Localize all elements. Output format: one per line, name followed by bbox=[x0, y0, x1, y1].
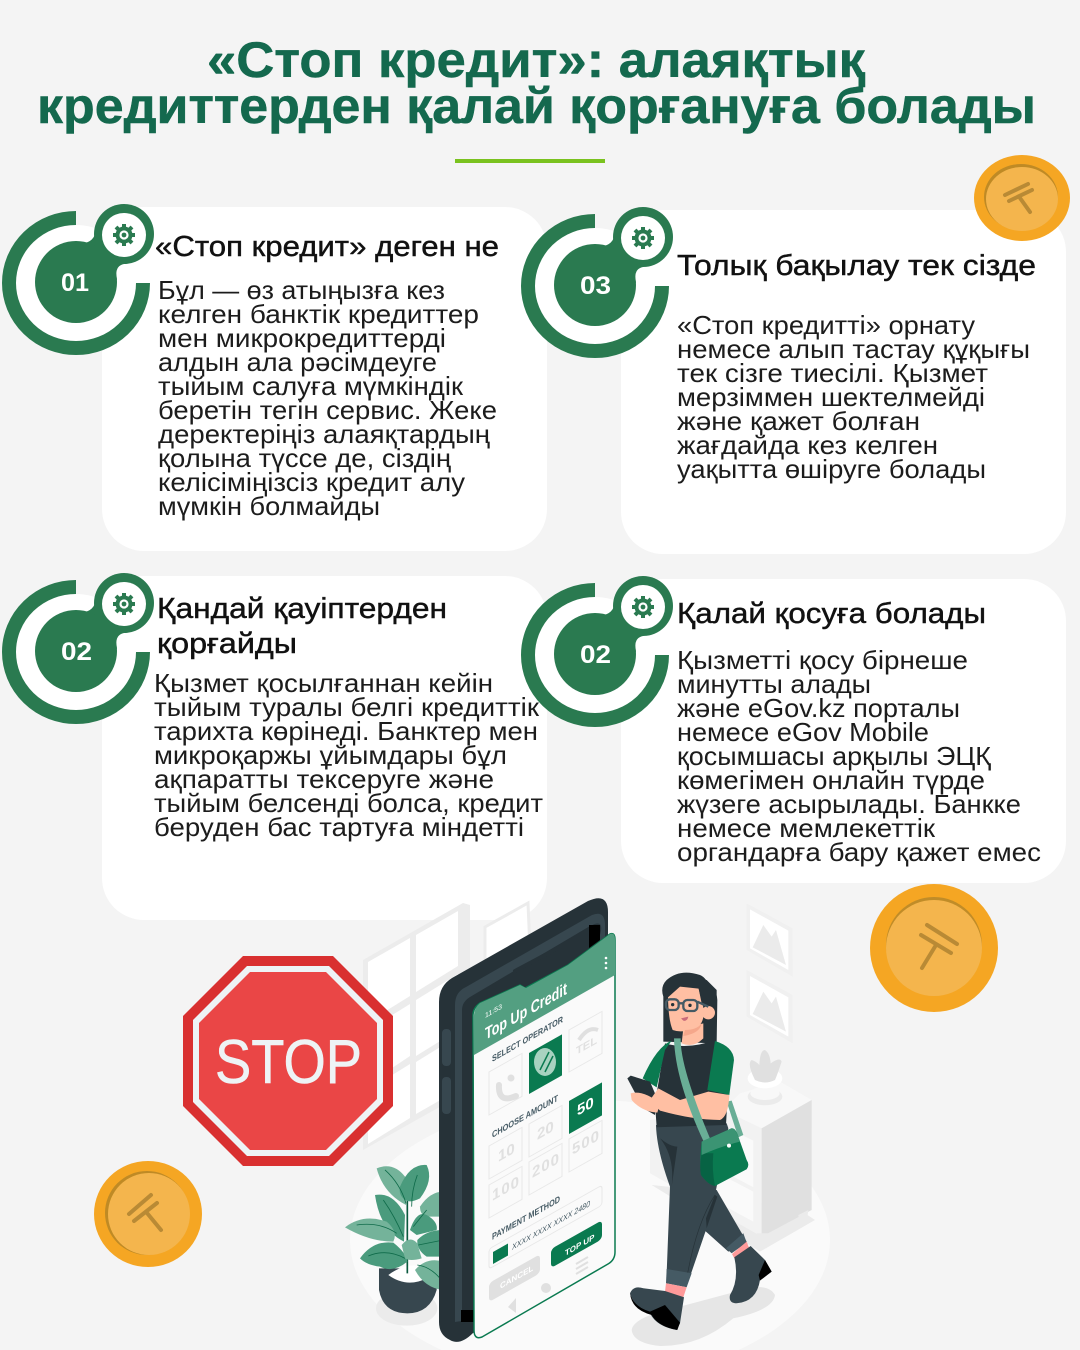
amounts: 500 bbox=[572, 1127, 599, 1159]
floor shadow bbox=[632, 1287, 775, 1346]
body text: жүзеге асырылады. Банкке bbox=[677, 789, 1021, 819]
illustration: woman walking with phone bbox=[627, 973, 775, 1346]
body text: мен микрокредиттерді bbox=[158, 323, 446, 353]
body text: беруден бас тартуға міндетті bbox=[154, 812, 524, 842]
amounts bbox=[489, 1082, 602, 1218]
back leg and boot bbox=[697, 1187, 747, 1252]
body text: немесе eGov Mobile bbox=[677, 717, 929, 747]
shirt bbox=[655, 1040, 728, 1127]
illustration: potted plant bbox=[345, 1165, 443, 1326]
coin: top right bbox=[974, 155, 1070, 241]
heading: қорғайды bbox=[157, 628, 297, 660]
body text: Қызметті қосу бірнеше bbox=[677, 645, 968, 675]
phone earpiece bbox=[515, 947, 560, 971]
body text: органдарға бару қажет емес bbox=[677, 837, 1041, 867]
body text: келген банктік кредиттер bbox=[158, 299, 479, 329]
cancel button bbox=[489, 1254, 540, 1302]
heading: Қандай қауіптерден bbox=[157, 593, 447, 625]
green sleeves bbox=[643, 1041, 672, 1087]
body text: жағдайда кез келген bbox=[677, 430, 938, 460]
badge 02 second bbox=[528, 576, 673, 720]
title underline bbox=[455, 159, 605, 163]
title: кредиттерден қалай қорғануға болады bbox=[37, 78, 1036, 134]
panel: what is stop credit bbox=[9, 204, 547, 551]
pants bbox=[656, 1123, 728, 1277]
body text bbox=[677, 310, 1030, 484]
cancel button: CANCEL bbox=[500, 1263, 533, 1291]
body text: немесе алып тастау құқығы bbox=[677, 334, 1030, 364]
body text: тыйым туралы белгі кредиттік bbox=[154, 692, 540, 722]
badge 01 bbox=[9, 204, 154, 348]
illustration: phone: Top Up Credit bbox=[485, 978, 567, 1044]
top up button: TOP UP bbox=[565, 1232, 595, 1258]
heading: «Стоп кредит» деген не bbox=[155, 231, 499, 263]
body text: алдын ала рәсімдеуге bbox=[158, 347, 437, 377]
front cuff bbox=[666, 1269, 692, 1287]
face bbox=[682, 1023, 703, 1045]
body text: қолына түссе де, сіздің bbox=[158, 443, 452, 473]
body text: мерзіммен шектелмейді bbox=[677, 382, 985, 412]
body text: және қажет болған bbox=[677, 406, 920, 436]
payment method bbox=[489, 1185, 602, 1269]
amounts: 200 bbox=[532, 1150, 559, 1182]
stop word: STOP bbox=[215, 1028, 362, 1097]
bag bbox=[700, 1128, 748, 1186]
body text: ақпаратты тексеруге және bbox=[154, 764, 494, 794]
title bbox=[37, 32, 1036, 134]
body text: Қызмет қосылғаннан кейін bbox=[154, 668, 493, 698]
body text: уақытта өшіруге болады bbox=[677, 454, 986, 484]
hair bbox=[662, 973, 717, 1043]
title: «Стоп кредит»: алаяқтық bbox=[207, 32, 866, 88]
badge 02 second: 02 bbox=[580, 641, 611, 669]
body text bbox=[158, 275, 497, 521]
window bbox=[363, 903, 470, 1150]
badge 01: 01 bbox=[61, 269, 89, 297]
illustration: phone bbox=[439, 898, 615, 1342]
body text: тек сізге тиесілі. Қызмет bbox=[677, 358, 988, 388]
amounts: 10 bbox=[498, 1140, 515, 1166]
heading: Қалай қосуға болады bbox=[677, 598, 986, 630]
top up button bbox=[551, 1220, 602, 1268]
badge 03 bbox=[528, 207, 673, 351]
panel: full control bbox=[528, 207, 1066, 554]
phone screen bbox=[473, 934, 615, 1338]
operators: TEL bbox=[576, 1033, 597, 1058]
strap behind arm bbox=[727, 1101, 743, 1137]
body text: тарихта көрінеді. Банктер мен bbox=[154, 716, 538, 746]
body text bbox=[677, 645, 1041, 867]
body text: минутты алады bbox=[677, 669, 871, 699]
bag strap bbox=[674, 1038, 711, 1142]
body text: деректеріңіз алаяқтардың bbox=[158, 419, 491, 449]
body text: көмегімен онлайн түрде bbox=[677, 765, 985, 795]
small picture behind phone bbox=[485, 903, 530, 975]
heading: Толық бақылау тек сізде bbox=[677, 250, 1036, 282]
floor ellipse bbox=[350, 1100, 830, 1350]
phone side buttons bbox=[442, 1029, 451, 1066]
amounts: 20 bbox=[537, 1118, 554, 1144]
body text: беретін тегін сервис. Жеке bbox=[158, 395, 497, 425]
illustration: phone: 11:53 bbox=[485, 1002, 502, 1020]
coin: bottom left bbox=[94, 1161, 202, 1267]
body text: Бұл — өз атыңызға кез bbox=[158, 275, 445, 305]
body text: қосымшасы арқылы ЭЦҚ bbox=[677, 741, 992, 771]
operators: SELECT OPERATOR bbox=[492, 1014, 563, 1065]
panel: how to enable bbox=[528, 576, 1066, 883]
heading bbox=[157, 593, 447, 660]
payment method: XXXX XXXX XXXX 2480 bbox=[511, 1198, 590, 1252]
badge 03: 03 bbox=[580, 272, 611, 300]
stop sign bbox=[183, 956, 393, 1166]
payment method: PAYMENT METHOD bbox=[492, 1194, 560, 1243]
body text: және eGov.kz порталы bbox=[677, 693, 960, 723]
badge 02 bbox=[9, 573, 154, 717]
coin: middle right bbox=[870, 884, 998, 1012]
panel: which risks bbox=[9, 573, 547, 920]
body text: «Стоп кредитті» орнату bbox=[677, 310, 975, 340]
body text: мүмкін болмайды bbox=[158, 491, 380, 521]
operators bbox=[489, 1011, 602, 1115]
illustration: room pictures and cabinet bbox=[650, 903, 815, 1252]
glasses bbox=[666, 999, 708, 1011]
badge 02: 02 bbox=[61, 638, 92, 666]
arm bbox=[650, 1088, 729, 1120]
body text: тыйым салуға мүмкіндік bbox=[158, 371, 464, 401]
body text: келісіміңізсіз кредит алу bbox=[158, 467, 465, 497]
amounts: CHOOSE AMOUNT bbox=[492, 1093, 558, 1141]
body text: немесе мемлекеттік bbox=[677, 813, 936, 843]
phone in hand bbox=[627, 1076, 657, 1115]
body text: тыйым белсенді болса, кредит bbox=[154, 788, 543, 818]
body text bbox=[154, 668, 543, 842]
body text: микроқаржы ұйымдары бұл bbox=[154, 740, 507, 770]
phone header bbox=[474, 934, 615, 1055]
amounts: 100 bbox=[492, 1173, 519, 1205]
front boot bbox=[630, 1287, 684, 1330]
amounts: 50 bbox=[577, 1094, 594, 1120]
